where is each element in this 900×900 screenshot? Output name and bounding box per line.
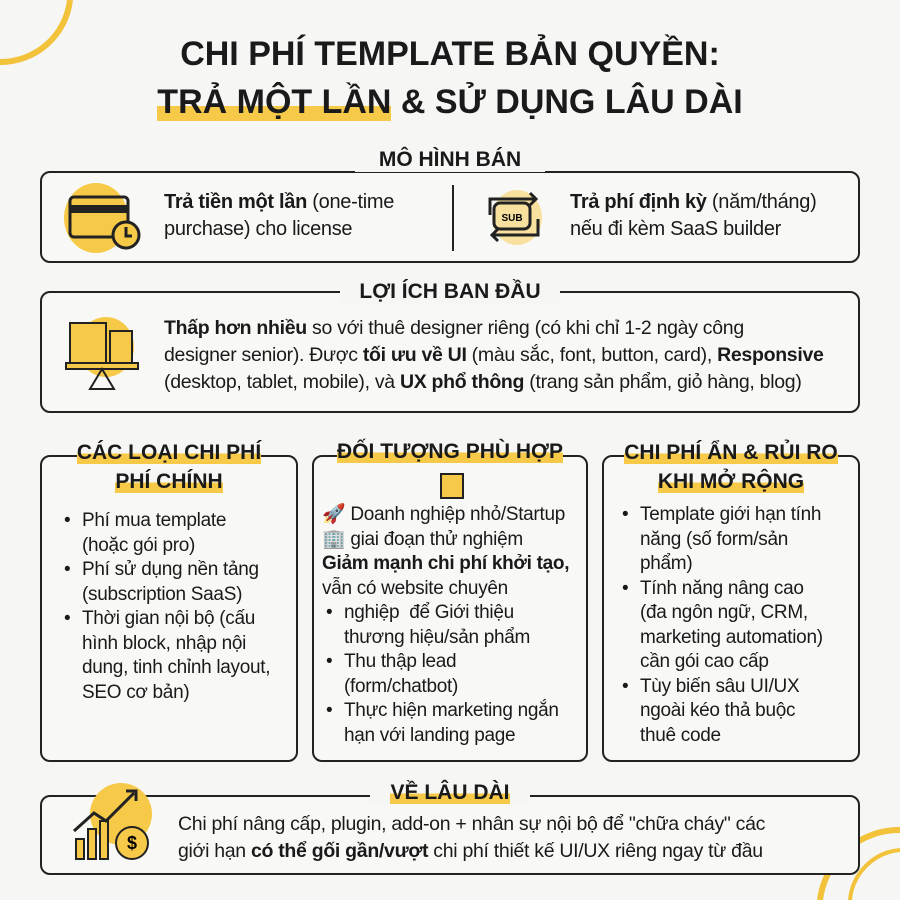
heading: chi phí ẩn: KHI MỞ RỘNG — [658, 470, 804, 493]
icon: card — [64, 183, 140, 253]
list: chi phí — [64, 510, 270, 702]
text: đối tượng: Thu thập lead (form/chatbot) — [344, 651, 458, 696]
text: đối tượng: Thực hiện marketing ngắn hạn với landing page — [344, 700, 559, 746]
heading: các loại chi phí: CÁC LOẠI CHI PHÍ — [77, 441, 261, 464]
heading: các loại chi phí: PHÍ CHÍNH — [115, 470, 223, 493]
list: chi phí: Phí sử dụng nền tảng (subscription SaaS) — [82, 559, 259, 604]
text: lâu dài: Chi phí nâng cấp, plugin, add-on + nhân sự nội bộ để "chữa cháy" các — [178, 813, 765, 835]
list: chi phí: Phí mua template (hoặc gói pro) — [82, 510, 226, 556]
list: chi phí: Thời gian nội bộ (cấu hình block, nhập nội dung, tinh chỉnh layout, SEO cơ bản) — [82, 608, 270, 702]
panel: chi phí ẩn — [602, 455, 860, 762]
heading: chi phí ẩn — [624, 440, 838, 493]
heading: mô hình bán: MÔ HÌNH BÁN — [379, 148, 521, 171]
text: lâu dài: giới hạn có thể gối gần/vượt chi phí thiết kế UI/UX riêng ngay từ đầu — [178, 840, 763, 862]
text: đối tượng: Giảm mạnh chi phí khởi tạo, vẫn có website chuyên — [322, 553, 569, 598]
text: đối tượng — [322, 503, 569, 746]
text: đối tượng: 🚀 Doanh nghiệp nhỏ/Startup — [322, 504, 565, 525]
heading: các loại chi phí — [77, 440, 262, 493]
icon: sub — [488, 190, 542, 245]
text: định kỳ: Trả phí định kỳ (năm/tháng) nếu đi kèm SaaS builder — [570, 191, 816, 240]
heading: lợi ích: LỢI ÍCH BAN ĐẦU — [359, 280, 541, 303]
heading: đối tượng: ĐỐI TƯỢNG PHÙ HỢP — [337, 440, 563, 463]
text: đối tượng: nghiệp để Giới thiệu thương hiệu/sản phẩm — [344, 602, 530, 648]
list: rủi ro: Tính năng nâng cao (đa ngôn ngữ, CRM, marketing automation) cần gói cao cấp — [640, 578, 823, 672]
icon: building — [440, 473, 464, 499]
heading: chi phí ẩn: CHI PHÍ ẨN & RỦI RO — [624, 441, 838, 464]
list: rủi ro: Tùy biến sâu UI/UX ngoài kéo thả buộc thuê code — [640, 676, 799, 746]
panel: các loại chi phí — [40, 455, 298, 762]
icon: finance — [65, 317, 139, 390]
text: one-time: Trả tiền một lần (one-time purchase) cho license — [164, 191, 394, 240]
panel: lợi ích — [40, 291, 860, 413]
text: lợi ích — [164, 317, 824, 393]
icon: sub: SUB — [501, 213, 523, 224]
icon: growth — [73, 783, 152, 860]
text: lâu dài — [178, 813, 765, 862]
title: TRẢ MỘT LẦN & SỬ DỤNG LÂU DÀI — [157, 83, 743, 121]
icon: growth: $ — [127, 833, 137, 853]
heading: về lâu dài: VỀ LÂU DÀI — [390, 781, 510, 804]
list: rủi ro: Template giới hạn tính năng (số form/sản phẩm) — [640, 504, 821, 574]
panel: đối tượng — [312, 455, 588, 762]
title: CHI PHÍ TEMPLATE BẢN QUYỀN: — [180, 35, 720, 73]
panel: mô hình bán — [40, 171, 860, 263]
panel: về lâu dài — [40, 795, 860, 875]
text: lợi ích: Thấp hơn nhiều so với thuê designer riêng (có khi chỉ 1-2 ngày công — [164, 317, 744, 339]
list: rủi ro — [622, 504, 823, 746]
text: lợi ích: designer senior). Được tối ưu về UI (màu sắc, font, button, card), Responsive (desktop, tablet, mobile), và UX phổ thông (trang sản phẩm, giỏ hàng, blog) — [164, 344, 824, 393]
text: đối tượng: 🏢 giai đoạn thử nghiệm — [322, 528, 523, 550]
title — [157, 34, 743, 121]
